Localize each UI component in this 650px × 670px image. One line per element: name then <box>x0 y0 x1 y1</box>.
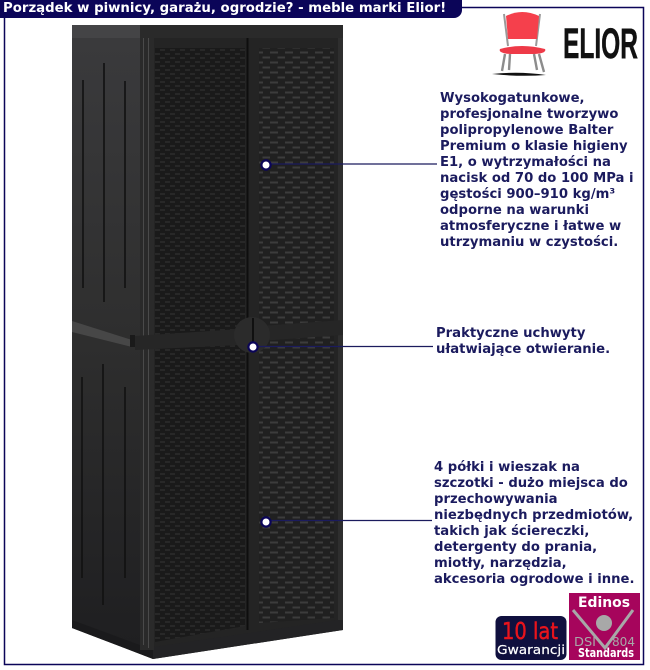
text block: handles: ułatwiające otwieranie. <box>436 342 610 357</box>
callout marker: handles <box>248 342 433 352</box>
text block: material <box>440 91 634 250</box>
callout marker: shelves <box>261 517 432 527</box>
text block: shelves: przechowywania <box>434 492 558 507</box>
logo: Elior chair and wordmark <box>492 12 638 76</box>
text block: material: polipropylenowe Balter <box>440 123 613 138</box>
badge: Edinos standards: Edinos <box>578 595 630 611</box>
text block: handles <box>436 326 610 357</box>
badge: Edinos standards: 804 <box>612 635 635 649</box>
cabinet body <box>72 25 343 659</box>
right door wicker <box>259 48 334 623</box>
badge: 10 year warranty: Gwarancji <box>497 642 565 657</box>
text block: shelves <box>434 460 634 587</box>
text block: material: utrzymaniu w czystości. <box>440 235 618 250</box>
text block: material: profesjonalne tworzywo <box>440 107 618 122</box>
badge: 10 year warranty <box>496 616 566 660</box>
title banner: Porządek w piwnicy, garażu, ogrodzie? - meble marki Elior! <box>3 1 446 16</box>
left door wicker <box>155 48 245 642</box>
text block: shelves: 4 półki i wieszak na <box>434 460 580 475</box>
text block: material: odporne na warunki <box>440 203 589 218</box>
text block: shelves: miotły, narzędzia, <box>434 556 567 571</box>
text block: shelves: detergenty do prania, <box>434 540 597 555</box>
badge: Edinos standards: DSI <box>574 635 596 649</box>
text block: material: E1, o wytrzymałości na <box>440 155 611 170</box>
side grooves <box>82 63 125 605</box>
callout marker: material <box>261 160 437 170</box>
door gap <box>246 38 248 630</box>
text block: shelves: szczotki - dużo miejsca do <box>434 476 628 491</box>
handle band <box>72 317 343 353</box>
text block: handles: Praktyczne uchwyty <box>436 326 585 341</box>
text block: shelves: niezbędnych przedmiotów, <box>434 508 633 523</box>
icon: red chair <box>492 12 546 76</box>
badge: 10 year warranty: 10 lat <box>502 619 558 645</box>
text block: shelves: akcesoria ogrodowe i inne. <box>434 572 634 587</box>
text block: material: Premium o klasie higieny <box>440 139 628 154</box>
text block: material: Wysokogatunkowe, <box>440 91 585 106</box>
badge: Edinos standards <box>569 593 640 660</box>
text block: shelves: takich jak ściereczki, <box>434 524 589 539</box>
text block: material: atmosferyczne i łatwe w <box>440 219 621 234</box>
text block: material: nacisk od 70 do 100 MPa i <box>440 171 634 186</box>
text block: material: gęstości 900–910 kg/m³ <box>440 187 615 202</box>
